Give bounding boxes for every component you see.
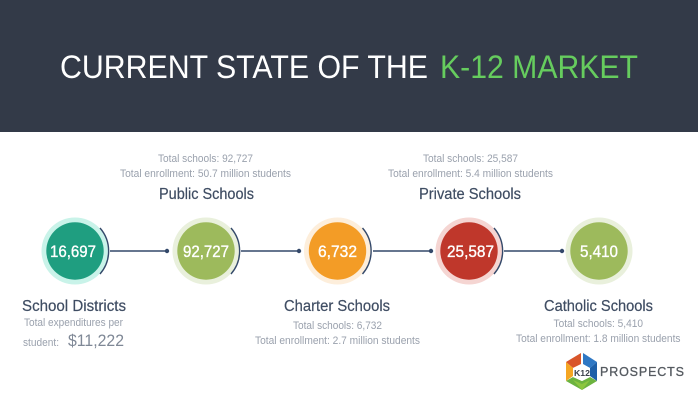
- text block: school districts: School Districts: [22, 298, 126, 315]
- text block: catholic schools: Total schools: 5,410: [554, 318, 643, 330]
- text block: public schools: Total enrollment: 50.7 million students: [120, 168, 291, 180]
- title: CURRENT STATE OF THE: [60, 49, 428, 85]
- text block: charter schools: [255, 298, 420, 347]
- node: catholic schools: [566, 218, 632, 284]
- text block: school districts: student:: [23, 337, 59, 349]
- text block: charter schools: Total schools: 6,732: [293, 320, 382, 332]
- text block: private schools: Private Schools: [419, 186, 521, 203]
- text block: private schools: [388, 153, 553, 203]
- node: public schools: [172, 218, 240, 284]
- text block: catholic schools: Catholic Schools: [544, 298, 653, 315]
- node: private schools: 25,587: [447, 243, 494, 261]
- node: school districts: [42, 218, 108, 284]
- node: private schools: [436, 218, 502, 284]
- text block: private schools: Total schools: 25,587: [423, 153, 518, 165]
- node: catholic schools: 5,410: [580, 243, 618, 261]
- node: charter schools: [304, 218, 371, 284]
- text block: charter schools: Charter Schools: [284, 298, 390, 315]
- title: K-12 MARKET: [440, 49, 638, 85]
- text block: catholic schools: [516, 298, 681, 345]
- text block: public schools: Total schools: 92,727: [158, 153, 253, 165]
- text block: school districts: Total expenditures per: [24, 317, 123, 329]
- node: charter schools: 6,732: [318, 243, 357, 261]
- text block: private schools: Total enrollment: 5.4 million students: [388, 168, 553, 180]
- text block: charter schools: Total enrollment: 2.7 million students: [255, 335, 420, 347]
- connector: charter to private: [362, 228, 432, 274]
- icon: hexagon: K12: [574, 368, 590, 378]
- node: school districts: 16,697: [50, 243, 96, 261]
- logo: K12 Prospects: [566, 353, 684, 390]
- logo: K12 Prospects: PROSPECTS: [600, 365, 684, 379]
- header banner: [0, 0, 698, 132]
- text block: public schools: Public Schools: [159, 186, 254, 203]
- connector: public to charter: [231, 228, 300, 274]
- node: public schools: 92,727: [183, 243, 229, 261]
- connector: private to catholic: [494, 228, 564, 274]
- text block: school districts: [22, 298, 126, 350]
- text block: school districts: $11,222: [68, 331, 124, 350]
- text block: public schools: [120, 153, 291, 203]
- connector: districts to public: [100, 228, 168, 274]
- text block: catholic schools: Total enrollment: 1.8 million students: [516, 333, 681, 345]
